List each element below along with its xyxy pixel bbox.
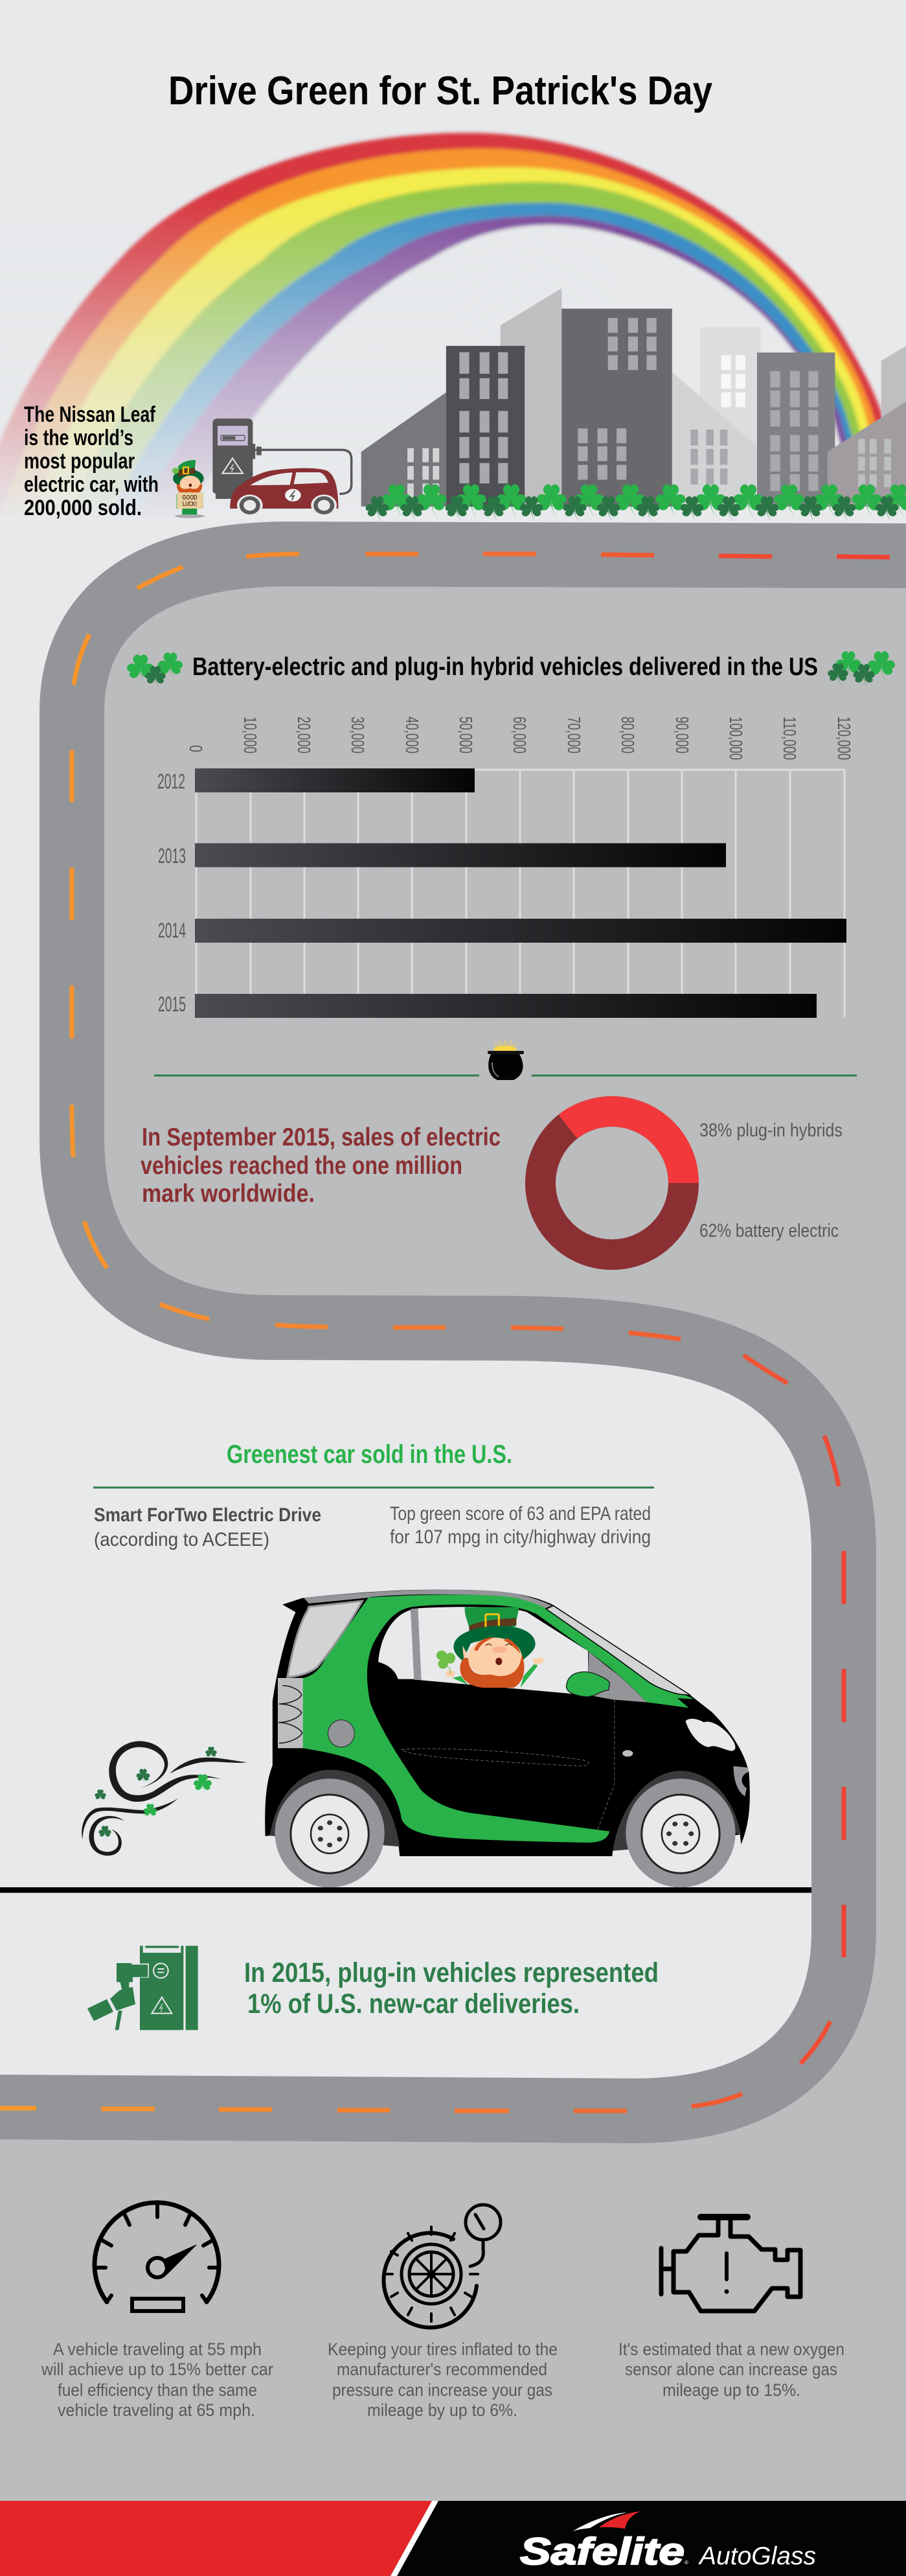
heading: greenest car: Greenest car sold in the U.S. [227,1440,512,1469]
text: speed tip: A vehicle traveling at 55 mph [53,2340,262,2359]
text: oxygen sensor tip: sensor alone can increase gas [625,2360,837,2379]
side windows [378,1607,646,1702]
text: tire tip: Keeping your tires inflated to the [328,2340,558,2359]
leprechaun driver [436,1607,544,1688]
icon: right clovers [827,651,896,687]
axis labels: 40,000 [402,717,422,753]
axis labels: 0 [186,745,206,752]
tail light panel [278,1678,304,1748]
icon: small leprechaun holding sign: LUCK! [183,501,197,508]
text: 1% of new-car deliveries: In 2015, plug-in vehicles represented [244,1957,659,1988]
text: tire tip: pressure can increase your gas [332,2380,552,2400]
text: Nissan Leaf fact: The Nissan Leaf [24,402,156,427]
text: one million milestone: In September 2015, sales of electric [142,1123,501,1151]
road surface line [0,1887,811,1893]
winding road [0,554,906,2111]
axis labels: 120,000 [834,717,854,760]
fuel cap [328,1720,354,1747]
year labels: 2012 [157,770,185,793]
green body panels [303,1594,694,1843]
icon: exhaust swirls with clovers [82,1741,247,1856]
front wheel [626,1778,736,1887]
year labels: 2015 [158,993,186,1016]
windshield [546,1605,690,1696]
grey ground panel [0,554,906,2576]
bars [195,768,846,1018]
road centre dashes [0,554,890,2111]
logo wordmark: Safelite [520,2531,685,2573]
axis labels: 50,000 [456,717,476,753]
text: 1% of new-car deliveries: 1% of U.S. new-car deliveries. [247,1988,580,2019]
icon: left clovers [126,652,184,687]
icon: green charging hand [87,1946,198,2030]
car body silhouette [265,1589,750,1856]
text: speed tip: vehicle traveling at 65 mph. [58,2400,255,2420]
text: oxygen sensor tip [618,2340,844,2400]
year labels [157,770,186,1016]
donut labels: 38% plug-in hybrids [699,1120,843,1141]
icon: small leprechaun holding sign [172,460,205,518]
text: car name: Smart ForTwo Electric Drive [94,1504,321,1526]
text: 1% of new-car deliveries [244,1957,659,2019]
wheel arches [270,1770,741,1851]
headlight [686,1719,736,1751]
axis labels: 110,000 [780,717,800,760]
text: tire tip [328,2340,558,2420]
logo wordmark: AutoGlass [698,2542,816,2570]
text: green score: for 107 mpg in city/highway driving [390,1526,651,1548]
axis labels: 60,000 [510,717,530,753]
text: Nissan Leaf fact: most popular [24,449,135,474]
text: one million milestone [141,1123,501,1208]
footer band with Safelite logo [0,2501,906,2576]
text: speed tip [41,2340,273,2420]
logo wordmark: ® [685,2560,688,2566]
title: Drive Green for St. Patrick's Day [168,69,712,113]
illustration: green and black smart car with leprechaun [265,1589,750,1887]
rainbow [0,133,906,535]
text: car name [94,1504,321,1550]
axis labels: 10,000 [240,717,260,753]
text: Nissan Leaf fact: 200,000 sold. [24,496,142,520]
axis labels: 70,000 [564,717,584,753]
wing mirror [567,1672,609,1697]
text: oxygen sensor tip: mileage up to 15%. [663,2380,800,2400]
text: Nissan Leaf fact: is the world’s [24,426,133,450]
donut labels [699,1120,843,1241]
logo wordmark [520,2531,816,2573]
text: green score [390,1503,651,1548]
chart heading with clovers [126,651,896,687]
icon: tire pressure gauge [383,2205,501,2328]
text: Nissan Leaf fact: electric car, with [24,472,159,497]
axis labels [186,717,854,760]
front bumper detail [734,1766,749,1797]
text: one million milestone: vehicles reached the one million [141,1152,462,1180]
axis labels: 90,000 [672,717,692,753]
text: oxygen sensor tip: It's estimated that a new oxygen [618,2340,844,2359]
text: one million milestone: mark worldwide. [142,1180,315,1208]
year labels: 2013 [158,844,186,868]
divider with pot of gold [154,1039,857,1080]
rear window [288,1601,363,1677]
axis labels: 80,000 [618,717,638,753]
donut chart [540,1096,843,1254]
year labels: 2014 [158,919,186,942]
clover hedge [365,485,906,521]
roof strip [304,1589,552,1609]
icon: small leprechaun holding sign: GOOD [183,494,197,501]
donut labels: 62% battery electric [699,1221,839,1241]
text: speed tip: will achieve up to 15% better car [41,2360,273,2379]
axis labels: 100,000 [726,717,746,760]
text: green score: Top green score of 63 and EPA rated [390,1503,651,1524]
city skyline buildings [361,288,906,507]
icon: check-engine symbol [661,2217,800,2311]
text: Nissan Leaf fact [24,402,159,520]
text: tire tip: mileage by up to 6%. [367,2400,517,2420]
text: speed tip: fuel efficiency than the same [58,2380,257,2400]
text: car name: (according to ACEEE) [94,1529,269,1550]
icon: pot of gold [488,1039,524,1080]
axis labels: 20,000 [294,717,314,753]
text: tire tip: manufacturer's recommended [337,2360,547,2379]
logo swoosh [572,2511,640,2531]
rear wheel [275,1778,385,1887]
axis labels: 30,000 [348,717,368,753]
bar chart: vehicles delivered [157,717,854,1018]
icon: charging station with red car [212,419,352,516]
icon: speedometer [95,2203,219,2311]
